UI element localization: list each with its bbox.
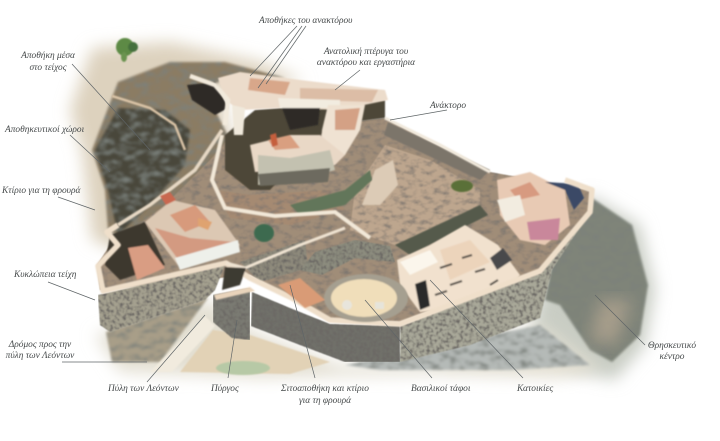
right houses <box>397 172 584 312</box>
right rocks <box>530 195 655 380</box>
label: lion gate: Πύλη των Λεόντων <box>107 384 180 394</box>
label: storerooms of the palace: Αποθήκες του ανακτόρου <box>258 16 353 26</box>
label: granary and garrison building: για τη φρουρά <box>299 396 352 406</box>
tree <box>116 38 138 62</box>
left houses <box>105 192 274 280</box>
label: religious centre <box>648 341 696 362</box>
upper hillside <box>70 42 305 250</box>
palace <box>218 72 388 186</box>
interior ground <box>97 100 590 322</box>
grave circle <box>278 274 408 322</box>
label: religious centre: Θρησκευτικό <box>648 341 696 351</box>
illustration: citadel <box>70 38 655 380</box>
label: cyclopean walls: Κυκλώπεια τείχη <box>13 270 77 280</box>
label: granary and garrison building <box>280 384 369 406</box>
label: religious centre: κέντρο <box>660 352 685 362</box>
cyclopean wall top <box>98 118 592 324</box>
label: garrison building: Κτίριο για τη φρουρά <box>1 186 81 196</box>
label: east wing <box>317 47 416 68</box>
front walls <box>98 212 590 362</box>
ground in front of walls <box>95 298 600 378</box>
winding path and ramp <box>112 76 370 238</box>
label: road to lion gate: Δρόμος προς την <box>8 340 72 350</box>
label: road to lion gate: πύλη των Λεόντων <box>6 351 75 361</box>
label: road to lion gate <box>6 340 75 361</box>
label: palace: Ανάκτορο <box>429 101 466 111</box>
leader lines <box>48 26 645 382</box>
label: east wing: Ανατολική πτέρυγα του <box>323 47 409 57</box>
label: granary and garrison building: Σιτοαποθήκη και κτίριο <box>280 384 369 394</box>
label: east wing: ανακτόρου και εργαστήρια <box>317 58 416 68</box>
label: dwellings: Κατοικίες <box>516 384 553 394</box>
label: storage areas: Αποθηκευτικοί χώροι <box>4 125 85 135</box>
label: tower: Πύργος <box>210 384 239 394</box>
label: storeroom in the wall <box>20 51 76 73</box>
label: storeroom in the wall: Αποθήκη μέσα <box>20 51 76 61</box>
label: storeroom in the wall: στο τείχος <box>29 63 67 73</box>
label: royal tombs: Βασιλικοί τάφοι <box>411 384 471 394</box>
